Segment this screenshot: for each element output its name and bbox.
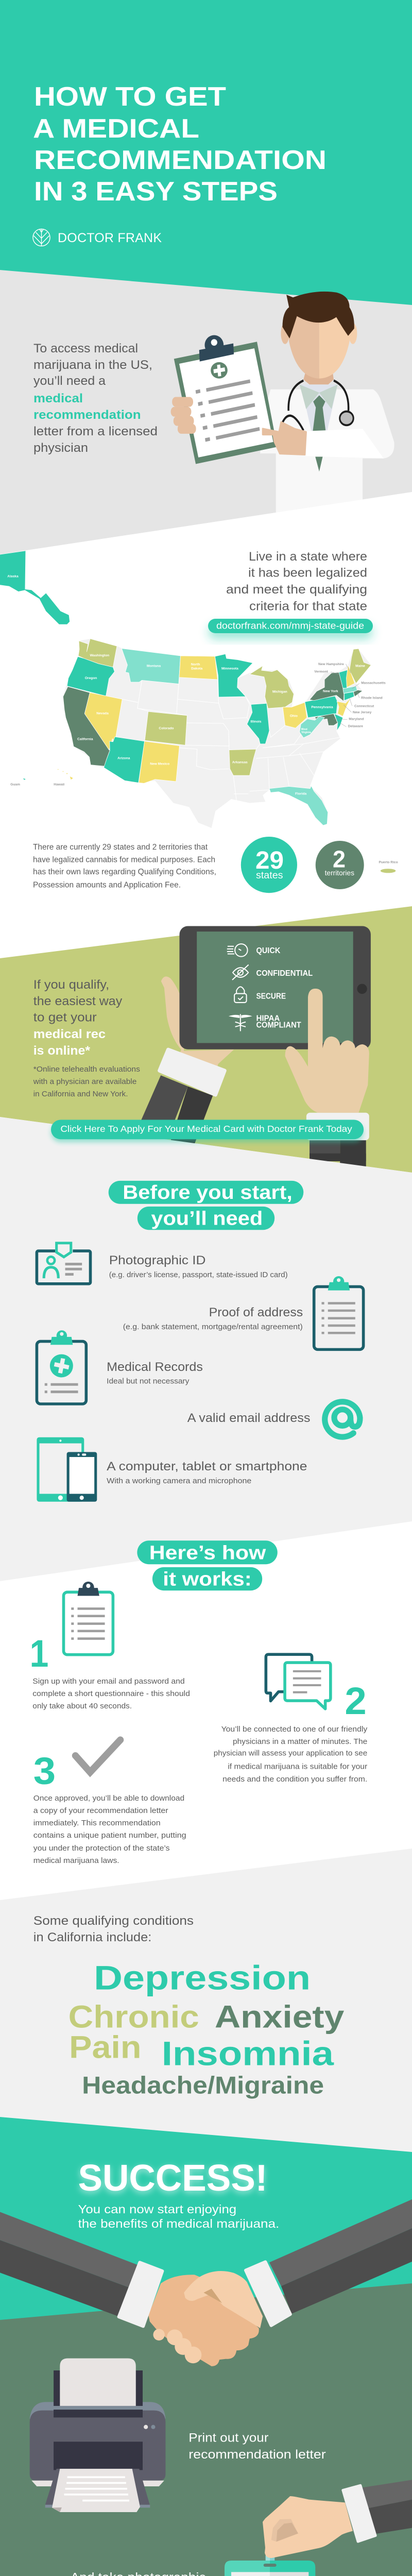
- text: if you qualify: [33, 978, 140, 1098]
- text: photographic ID: [109, 1253, 288, 1279]
- map: US medical marijuana states: Connecticut: [354, 704, 374, 708]
- text: computer tablet or smartphone: A computer, tablet or smartphone: [107, 1460, 307, 1473]
- step 3: download recommendation: [33, 1740, 186, 1865]
- intro text: To access medical: [33, 342, 138, 355]
- step 2: connect with physician: needs and the condition you suffer from.: [222, 1775, 367, 1784]
- text: if you qualify: in California and New York.: [33, 1090, 128, 1098]
- illustration: hands holding tablet: COMPLIANT: [256, 1021, 301, 1029]
- word cloud: qualifying conditions: Anxiety: [215, 1999, 344, 2035]
- step 3: download recommendation: you under the protection of the state’s: [33, 1844, 170, 1853]
- panel: olive online section background: [0, 906, 412, 1173]
- heading: live in a state: criteria for that state: [249, 600, 367, 613]
- map: US medical marijuana states: North: [191, 663, 200, 666]
- illustration: hands holding tablet: CONFIDENTIAL: [256, 969, 313, 978]
- heading: live in a state: and meet the qualifying: [226, 583, 367, 597]
- intro text: medical: [33, 392, 83, 405]
- heading: live in a state: Live in a state where: [249, 550, 367, 564]
- map: US medical marijuana states: Illinois: [250, 720, 262, 724]
- map: US medical marijuana states: Rhode Island: [361, 697, 383, 700]
- step 3: download recommendation: contains a unique patient number, putting: [33, 1832, 186, 1840]
- heading: success: SUCCESS!: [78, 2158, 268, 2199]
- text: some qualifying conditions: Some qualifying conditions: [33, 1914, 194, 1928]
- map: US medical marijuana states: Hawaii: [54, 783, 64, 786]
- illustration: printer: [30, 2359, 165, 2512]
- map: US medical marijuana states: Nevada: [96, 712, 109, 716]
- illustration: hands holding tablet: SECURE: [256, 992, 286, 1001]
- text: print out your letter: [188, 2431, 326, 2462]
- map: US medical marijuana states: Virginia: [301, 731, 311, 734]
- map: US medical marijuana states: Michigan: [272, 690, 287, 693]
- map: US medical marijuana states: Maryland: [349, 717, 364, 721]
- map: US medical marijuana states: Maine: [355, 664, 365, 668]
- word cloud: qualifying conditions: Pain: [69, 2029, 141, 2064]
- intro text: physician: [33, 441, 88, 455]
- icon: address document clipboard: [314, 1276, 364, 1349]
- intro text: letter from a licensed: [33, 425, 158, 438]
- heading: live in a state: it has been legalized: [248, 566, 367, 580]
- text: legalized states paragraph: [33, 843, 216, 889]
- illustration: hands holding tablet: [139, 926, 371, 1166]
- text: if you qualify: to get your: [33, 1011, 97, 1025]
- step 2: connect with physician: [214, 1654, 368, 1784]
- map: US medical marijuana states: New Mexico: [150, 762, 169, 766]
- logo: Doctor Frank header: DOCTOR FRANK: [58, 231, 162, 245]
- map: US medical marijuana states: Oregon: [85, 676, 97, 680]
- title: RECOMMENDATION: [34, 145, 327, 175]
- heading: before you start: [109, 1181, 303, 1230]
- word cloud: qualifying conditions: Headache/Migraine: [82, 2072, 324, 2098]
- title: HOW TO GET: [34, 82, 226, 112]
- button: state guide link: doctorfrank.com/mmj-state-guide: [216, 620, 364, 631]
- map: US medical marijuana states: Ohio: [290, 714, 298, 718]
- stat: 29 states: 29: [255, 847, 284, 874]
- step 2: connect with physician: physician will assess your application to see: [214, 1750, 367, 1758]
- intro text: [33, 342, 158, 455]
- map: US medical marijuana states: New Jersey: [353, 711, 372, 715]
- text: benefits subtitle: You can now start enjoying: [78, 2202, 236, 2216]
- map: US medical marijuana states: [0, 551, 398, 873]
- illustration: hands holding tablet: QUICK: [256, 946, 280, 955]
- panel: intro grey background: [0, 268, 412, 554]
- text: benefits subtitle: the benefits of medical marijuana.: [78, 2217, 279, 2230]
- word cloud: qualifying conditions: [68, 1959, 344, 2098]
- text: if you qualify: is online*: [33, 1044, 91, 1058]
- text: legalized states paragraph: There are currently 29 states and 2 territories that: [33, 843, 208, 852]
- step 3: download recommendation: medical marijuana laws.: [33, 1857, 119, 1865]
- step 3: download recommendation: 3: [33, 1749, 56, 1792]
- map: US medical marijuana states: Alaska: [7, 574, 19, 578]
- icon: tablet and smartphone: [37, 1437, 97, 1502]
- text: proof of address: Proof of address: [209, 1306, 303, 1319]
- map: US medical marijuana states: West: [301, 728, 307, 731]
- map: US medical marijuana states: Arizona: [117, 756, 130, 760]
- icon: at sign: [325, 1402, 360, 1437]
- heading: here's how it works: Here’s how: [149, 1542, 266, 1564]
- map: US medical marijuana states: New York: [323, 689, 338, 693]
- word cloud: qualifying conditions: Chronic: [68, 1999, 199, 2035]
- step 2: connect with physician: if medical marijuana is suitable for your: [228, 1763, 367, 1771]
- title: [33, 82, 327, 207]
- heading: live in a state: [226, 550, 367, 613]
- icon: photo ID card: [37, 1241, 91, 1284]
- stat: 2 territories: [316, 841, 364, 889]
- text: computer tablet or smartphone: [107, 1460, 307, 1485]
- panel: white map section background: [0, 492, 412, 969]
- panel: qualifying conditions background: [0, 1849, 412, 2152]
- button: state guide link: [208, 619, 373, 633]
- map: US medical marijuana states: Florida: [295, 792, 307, 795]
- step 1: sign up: only take about 40 seconds.: [32, 1702, 132, 1710]
- title: A MEDICAL: [33, 114, 199, 144]
- map: US medical marijuana states: Dakota: [191, 667, 202, 670]
- text: if you qualify: If you qualify,: [33, 978, 109, 992]
- text: some qualifying conditions: in California include:: [33, 1930, 151, 1944]
- text: if you qualify: with a physician are available: [33, 1078, 136, 1086]
- title: IN 3 EASY STEPS: [34, 177, 278, 207]
- map: US medical marijuana states: Montana: [147, 664, 161, 668]
- map: US medical marijuana states: Guam: [10, 783, 20, 786]
- text: if you qualify: medical rec: [33, 1027, 106, 1041]
- step 2: connect with physician: 2: [345, 1680, 367, 1722]
- illustration: doctor holding clipboard: [171, 292, 394, 515]
- text: proof of address: [123, 1306, 303, 1331]
- heading: here's how it works: [137, 1540, 278, 1590]
- step 1: sign up: Sign up with your email and password and: [32, 1677, 185, 1686]
- button: apply for medical card: Click Here To Apply For Your Medical Card with Doctor Frank Today: [60, 1124, 352, 1134]
- step 3: download recommendation: Once approved, you’ll be able to download: [33, 1794, 184, 1803]
- text: photographic ID: Photographic ID: [109, 1253, 205, 1267]
- stat: 29 states: [241, 837, 297, 893]
- word cloud: qualifying conditions: Insomnia: [162, 2035, 334, 2073]
- intro text: recommendation: [33, 408, 141, 422]
- text: photographic ID: (e.g. driver’s license, passport, state-issued ID card): [109, 1271, 288, 1279]
- map: US medical marijuana states: Vermont: [314, 670, 329, 674]
- text: legalized states paragraph: have legalized cannabis for medical purposes. Each: [33, 855, 215, 865]
- text: medical records: Ideal but not necessary: [107, 1378, 190, 1386]
- panel: teal header background: [0, 0, 412, 305]
- stat: 2 territories: territories: [325, 869, 354, 877]
- map: US medical marijuana states: California: [77, 738, 93, 741]
- map: US medical marijuana states: Massachusetts: [361, 682, 386, 685]
- text: if you qualify: the easiest way: [33, 994, 122, 1008]
- step 1: sign up: 1: [30, 1632, 48, 1675]
- stat: 29 states: states: [256, 870, 283, 881]
- text: benefits subtitle: [78, 2202, 279, 2230]
- step 2: connect with physician: physicians in a matter of minutes. The: [233, 1738, 367, 1746]
- text: medical records: [107, 1360, 203, 1386]
- stat: 2 territories: 2: [333, 846, 346, 873]
- text: if you qualify: *Online telehealth evaluations: [33, 1065, 140, 1074]
- step 1: sign up: [30, 1582, 190, 1710]
- step 3: download recommendation: a copy of your recommendation letter: [33, 1807, 168, 1815]
- intro text: marijuana in the US,: [33, 358, 152, 372]
- logo: Doctor Frank header: [33, 229, 162, 246]
- panel: success teal background: [0, 2117, 412, 2329]
- intro text: you’ll need a: [33, 374, 106, 388]
- text: print out your letter: Print out your: [188, 2431, 268, 2445]
- heading: here's how it works: it works:: [163, 1568, 252, 1590]
- text: some qualifying conditions: [33, 1914, 194, 1944]
- text: computer tablet or smartphone: With a working camera and microphone: [107, 1477, 251, 1485]
- step 2: connect with physician: You’ll be connected to one of our friendly: [221, 1725, 368, 1734]
- icon: medical records clipboard: [37, 1330, 86, 1404]
- map: US medical marijuana states: Pennsylvania: [311, 705, 333, 709]
- step 3: download recommendation: immediately. This recommendation: [33, 1819, 161, 1827]
- word cloud: qualifying conditions: Depression: [94, 1959, 311, 1997]
- heading: before you start: Before you start,: [123, 1181, 293, 1203]
- panel: light grey before you start background: [0, 1117, 412, 1581]
- map: US medical marijuana states: Minnesota: [221, 667, 238, 670]
- map: US medical marijuana states: Arkansas: [232, 761, 248, 765]
- map: US medical marijuana states: Puerto Rico: [379, 861, 398, 865]
- illustration: handshake: [0, 2199, 412, 2366]
- button: apply for medical card: [51, 1120, 364, 1139]
- step 1: sign up: complete a short questionnaire - this should: [32, 1690, 190, 1698]
- illustration: hand holding ID badge: [225, 2480, 412, 2576]
- map: US medical marijuana states: Washington: [90, 654, 109, 657]
- text: legalized states paragraph: Possession amounts and Application Fee.: [33, 881, 181, 889]
- text: medical records: Medical Records: [107, 1360, 203, 1374]
- map: US medical marijuana states: Delaware: [348, 725, 363, 728]
- text: valid email address: A valid email address: [187, 1411, 311, 1425]
- text: proof of address: (e.g. bank statement, mortgage/rental agreement): [123, 1323, 303, 1331]
- illustration: hands holding tablet: HIPAA: [256, 1014, 280, 1023]
- panel: green next steps background: [0, 2283, 412, 2576]
- text: print out your letter: recommendation letter: [188, 2448, 326, 2462]
- heading: before you start: you’ll need: [151, 1208, 263, 1229]
- map: US medical marijuana states: New Hampshire: [318, 663, 344, 666]
- text: legalized states paragraph: has their own laws regarding Qualifying Conditions,: [33, 868, 216, 876]
- map: US medical marijuana states: Colorado: [159, 726, 174, 730]
